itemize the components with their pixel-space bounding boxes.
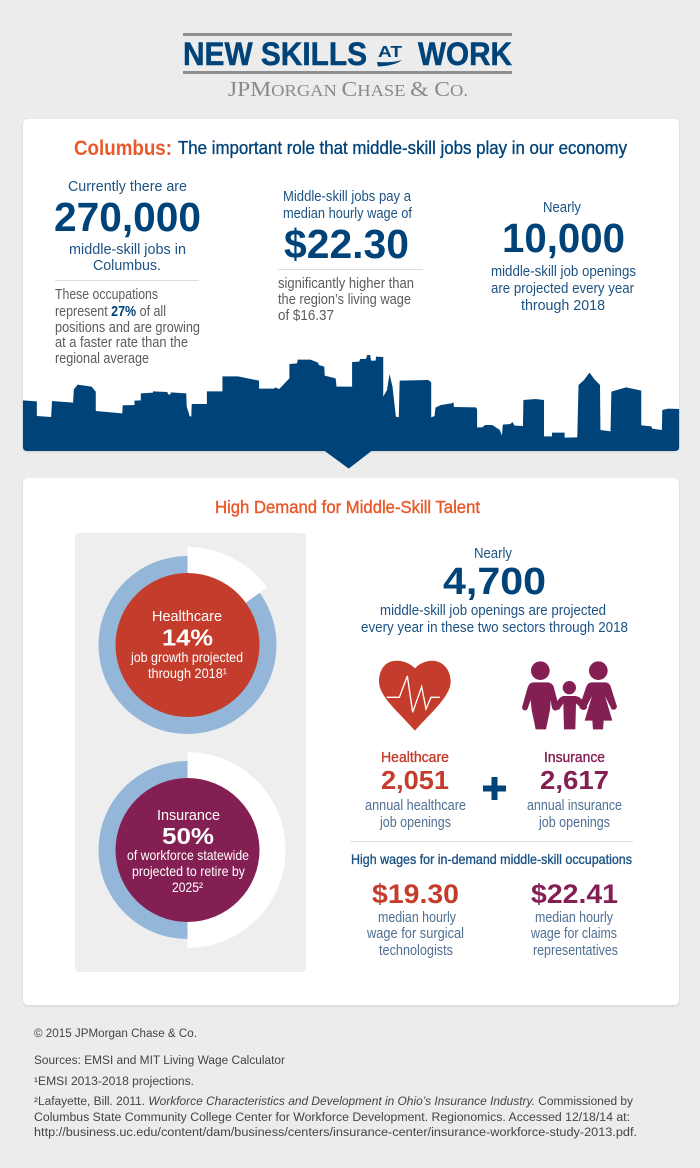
stat: $19.30 wage bbox=[366, 879, 464, 959]
stat: $19.30 wage: wage for surgical bbox=[366, 926, 464, 942]
footer: sources and notes: © 2015 JPMorgan Chase & Co. bbox=[34, 1028, 197, 1040]
stat: 10,000 openings: middle-skill job openings bbox=[491, 263, 636, 280]
icon: family bbox=[522, 661, 617, 729]
stat: 270,000 jobs: Currently there are bbox=[68, 178, 187, 195]
heading: high wages: High wages for in-demand middle-skill occupations bbox=[351, 851, 632, 867]
donut chart: Healthcare 14%: job growth projected bbox=[130, 649, 243, 665]
donut chart: Insurance 50%: 50% bbox=[162, 823, 214, 849]
heading: Columbus title bbox=[74, 137, 628, 160]
stat: 270,000 jobs: at a faster rate than the bbox=[55, 335, 188, 351]
logo: New Skills at Work: JPM ORGAN CHASE & C O. bbox=[228, 77, 468, 101]
stat: $22.30 median wage: Middle-skill jobs pay a bbox=[283, 188, 412, 205]
stat: 10,000 openings: 10,000 bbox=[502, 215, 625, 261]
stat: 4,700 openings: every year in these two sectors through 2018 bbox=[361, 619, 628, 636]
footer: sources and notes: ²Lafayette, Bill. 2011. Workforce Characteristics and Development in Ohio’s Insurance Industry. Commissioned by bbox=[34, 1096, 633, 1108]
donut chart: Insurance 50%: of workforce statewide bbox=[127, 847, 249, 863]
stat: $19.30 wage: median hourly bbox=[378, 910, 457, 926]
donut chart: Healthcare 14%: through 2018¹ bbox=[148, 665, 227, 681]
skyline with pointer bbox=[23, 355, 679, 469]
stat: 10,000 openings: Nearly bbox=[543, 199, 581, 216]
donut chart: Insurance 50%: projected to retire by bbox=[132, 863, 245, 879]
stat: Healthcare 2,051: annual healthcare bbox=[365, 798, 466, 814]
stat: $22.41 wage: median hourly bbox=[535, 910, 614, 926]
stat: 4,700 openings: middle-skill job openings are projected bbox=[380, 602, 606, 619]
stat: $19.30 wage: $19.30 bbox=[372, 879, 459, 909]
stat: $22.41 wage: wage for claims bbox=[530, 926, 617, 942]
stat: 270,000 jobs: Columbus. bbox=[93, 257, 161, 274]
stat: 10,000 openings bbox=[491, 199, 636, 314]
stat: $22.41 wage: $22.41 bbox=[531, 879, 618, 909]
stat: 270,000 jobs: 270,000 bbox=[54, 194, 201, 240]
heading: High Demand: High Demand for Middle-Skill Talent bbox=[215, 497, 480, 517]
donut chart: Insurance 50% bbox=[98, 752, 286, 948]
stat: 4,700 openings bbox=[361, 545, 628, 636]
donut chart: Healthcare 14%: Healthcare bbox=[152, 608, 222, 625]
stat: Healthcare 2,051 bbox=[365, 749, 466, 831]
stat: Healthcare 2,051: job openings bbox=[379, 815, 451, 831]
stat: $22.30 median wage: significantly higher than bbox=[278, 276, 414, 292]
stat: 270,000 jobs: regional average bbox=[55, 351, 149, 367]
stat: 270,000 jobs bbox=[54, 178, 201, 367]
stat: 270,000 jobs: positions and are growing bbox=[55, 320, 200, 336]
stat: 4,700 openings: Nearly bbox=[474, 545, 512, 562]
footer: sources and notes bbox=[34, 1028, 637, 1139]
stat: $22.41 wage: representatives bbox=[533, 943, 618, 959]
stat: $22.30 median wage: the region’s living wage bbox=[278, 292, 411, 308]
stat: $22.41 wage bbox=[530, 879, 618, 959]
donut chart: Healthcare 14% bbox=[98, 547, 276, 734]
panel: donut charts background bbox=[75, 533, 306, 972]
stat: Insurance 2,617: 2,617 bbox=[540, 767, 609, 795]
footer: sources and notes: ¹EMSI 2013-2018 projections. bbox=[34, 1076, 194, 1088]
panel: Columbus overview bbox=[23, 119, 679, 469]
heading: Columbus title: Columbus: bbox=[74, 137, 172, 160]
stat: $19.30 wage: technologists bbox=[379, 943, 453, 959]
stat: 270,000 jobs: represent 27% of all bbox=[55, 304, 166, 320]
stat: $22.30 median wage: $22.30 bbox=[284, 221, 409, 267]
stat: Insurance 2,617: job openings bbox=[538, 815, 610, 831]
stat: 10,000 openings: through 2018 bbox=[521, 297, 605, 314]
footer: sources and notes: Columbus State Community College Center for Workforce Development. Regionomics. Accessed 12/18/14 at: bbox=[34, 1112, 630, 1124]
stat: $22.30 median wage bbox=[278, 188, 423, 324]
stat: $22.30 median wage: of $16.37 bbox=[278, 308, 334, 324]
stat: Healthcare 2,051: 2,051 bbox=[381, 767, 449, 795]
logo: New Skills at Work: WORK bbox=[418, 36, 512, 72]
heading: Columbus title: The important role that middle-skill jobs play in our economy bbox=[178, 137, 628, 158]
stat: Insurance 2,617: annual insurance bbox=[527, 798, 622, 814]
panel: High demand bbox=[23, 478, 679, 1005]
stat: 10,000 openings: are projected every year bbox=[491, 280, 634, 297]
stat: Insurance 2,617 bbox=[527, 749, 622, 831]
stat: Insurance 2,617: Insurance bbox=[544, 749, 605, 766]
stat: 4,700 openings: 4,700 bbox=[443, 561, 546, 603]
donut chart: Insurance 50%: Insurance bbox=[157, 807, 220, 824]
logo: New Skills at Work: AT bbox=[378, 44, 403, 61]
stat: 270,000 jobs: middle-skill jobs in bbox=[69, 241, 186, 258]
logo: New Skills at Work bbox=[183, 33, 512, 101]
footer: sources and notes: http://business.uc.edu/content/dam/business/centers/insurance-center/insurance-workforce-study-2013.pdf. bbox=[34, 1127, 637, 1139]
donut chart: Healthcare 14%: 14% bbox=[162, 624, 213, 650]
stat: 270,000 jobs: These occupations bbox=[55, 287, 158, 303]
icon: heart with pulse bbox=[379, 661, 451, 731]
stat: $22.30 median wage: median hourly wage of bbox=[283, 205, 413, 222]
donut chart: Insurance 50%: 2025² bbox=[172, 879, 203, 895]
icon: plus sign bbox=[483, 777, 506, 800]
logo: New Skills at Work: NEW SKILLS bbox=[183, 36, 367, 72]
stat: Healthcare 2,051: Healthcare bbox=[381, 749, 449, 766]
footer: sources and notes: Sources: EMSI and MIT Living Wage Calculator bbox=[34, 1055, 285, 1067]
